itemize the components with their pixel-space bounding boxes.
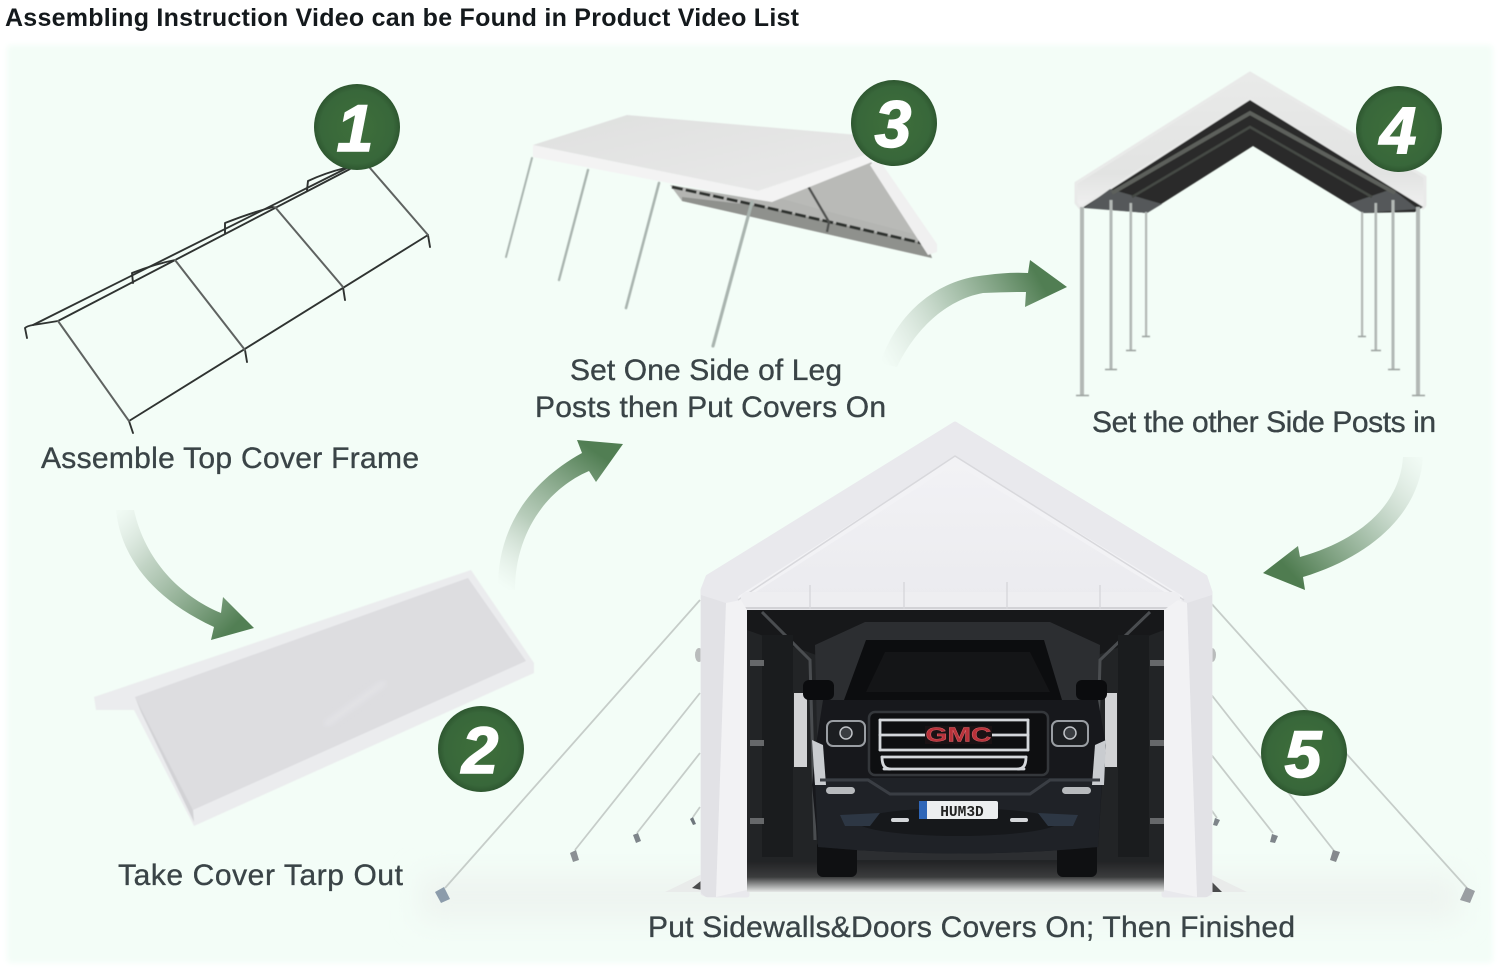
step 2: cover tarp (94, 570, 534, 826)
licence plate: HUM3D (940, 805, 984, 821)
step 3 badge (851, 80, 937, 166)
arrow: step 3 to step 4 (880, 260, 1067, 367)
arrow: step 2 to step 3 (498, 440, 623, 590)
truck in the carport (803, 640, 1107, 877)
step 1 caption: Assemble Top Cover Frame (41, 442, 419, 475)
step 4: full frame with all posts (1076, 73, 1425, 396)
step 2 badge: 2 (460, 713, 499, 787)
licence plate (919, 801, 998, 821)
title: Assembling Instruction Video can be Found in Product Video List (5, 4, 800, 32)
step 1 badge (314, 84, 400, 170)
step 3 caption (535, 354, 886, 424)
step 4 badge (1356, 86, 1442, 172)
step 5 caption: Put Sidewalls&Doors Covers On; Then Finished (648, 911, 1295, 944)
step 5: finished carport tent (701, 424, 1212, 897)
step 1 badge: 1 (337, 91, 373, 165)
step 5: guy ropes and stakes (435, 600, 1475, 903)
GMC logo: GMC (926, 724, 992, 746)
step 3 caption: Set One Side of Leg (570, 354, 842, 387)
step 5 badge (1261, 710, 1347, 796)
step 4 badge: 4 (1378, 93, 1416, 167)
arrow: step 4 to step 5 (1263, 457, 1423, 590)
step 3 caption: Posts then Put Covers On (535, 391, 886, 424)
step 5 badge: 5 (1285, 717, 1323, 791)
step 3 badge: 3 (875, 87, 911, 161)
step 2 caption: Take Cover Tarp Out (118, 859, 404, 892)
step 4 caption: Set the other Side Posts in (1092, 406, 1436, 439)
step 3: canopy with one side of leg posts (506, 115, 937, 346)
arrow: step 1 to step 2 (116, 510, 254, 640)
step 1: top cover frame drawing (25, 168, 430, 433)
step 2 badge (438, 706, 524, 792)
